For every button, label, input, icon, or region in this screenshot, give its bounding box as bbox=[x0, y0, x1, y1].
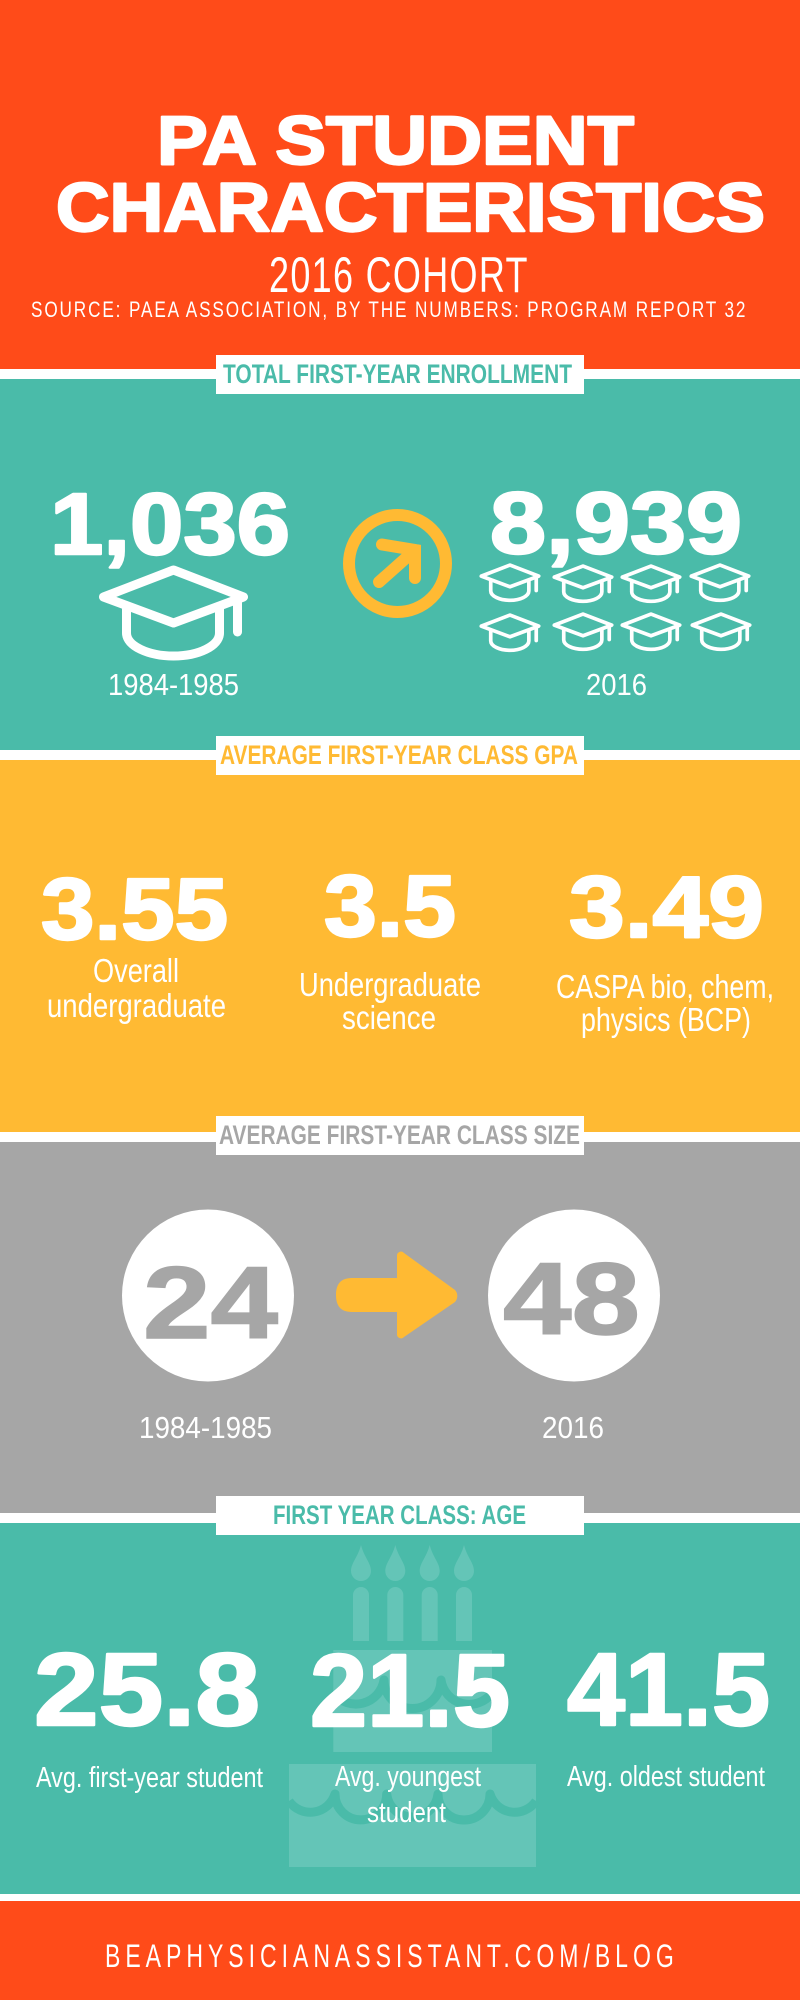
subtitle: 2016 COHORT bbox=[269, 248, 527, 303]
heading: age: FIRST YEAR CLASS: AGE bbox=[273, 1500, 526, 1530]
stat: overall undergraduate GPA bbox=[41, 861, 228, 1024]
icon: large graduation cap bbox=[104, 570, 244, 656]
heading: class size bbox=[216, 1116, 584, 1155]
stat: average youngest student age bbox=[310, 1633, 510, 1829]
stat: overall undergraduate GPA: undergraduate bbox=[47, 987, 226, 1024]
footer link text: BEAPHYSICIANASSISTANT.COM/BLOG bbox=[105, 1938, 674, 1974]
panel: header bbox=[0, 0, 800, 369]
stat circle: 48: 48 bbox=[503, 1242, 640, 1356]
panel: age bbox=[0, 1496, 800, 1894]
stat: average first-year student age bbox=[34, 1632, 263, 1794]
stat: average first-year student age: 25.8 bbox=[34, 1632, 260, 1747]
stat: CASPA BCP GPA: physics (BCP) bbox=[581, 1001, 751, 1038]
icon: birthday cake watermark bbox=[289, 1545, 536, 1867]
title line 2: CHARACTERISTICS bbox=[56, 169, 765, 246]
heading: GPA bbox=[216, 736, 584, 775]
panel: average GPA bbox=[0, 736, 800, 1132]
stat: average youngest student age: student bbox=[367, 1797, 446, 1829]
heading: enrollment: TOTAL FIRST-YEAR ENROLLMENT bbox=[223, 359, 572, 389]
panel: average class size bbox=[0, 1116, 800, 1513]
heading: class size: AVERAGE FIRST-YEAR CLASS SIZE bbox=[219, 1120, 580, 1150]
label: 1984-1985: 1984-1985 bbox=[108, 667, 239, 702]
stat: CASPA BCP GPA: 3.49 bbox=[569, 859, 764, 956]
stat: 1,036: 1,036 bbox=[50, 476, 290, 573]
stat: average oldest student age: 41.5 bbox=[567, 1632, 770, 1747]
stat: CASPA BCP GPA bbox=[556, 859, 774, 1038]
stat: average first-year student age: Avg. first-year student bbox=[36, 1762, 263, 1794]
icon: right arrow bbox=[336, 1252, 457, 1338]
label: 2016: 2016 bbox=[542, 1410, 604, 1445]
stat: undergraduate science GPA: 3.5 bbox=[324, 858, 456, 955]
stat: average youngest student age: Avg. youngest bbox=[335, 1761, 481, 1793]
stat: 8,939: 8,939 bbox=[490, 475, 742, 572]
heading: GPA: AVERAGE FIRST-YEAR CLASS GPA bbox=[220, 740, 578, 770]
stat circle: 48 bbox=[488, 1210, 660, 1382]
icon: circled up-right arrow bbox=[349, 515, 446, 612]
stat: overall undergraduate GPA: 3.55 bbox=[41, 861, 228, 958]
label: 2016: 2016 bbox=[586, 667, 647, 702]
stat: undergraduate science GPA: science bbox=[342, 999, 436, 1036]
heading: enrollment bbox=[216, 355, 584, 394]
panel: footer bbox=[0, 1901, 800, 2000]
stat circle: 24: 24 bbox=[143, 1246, 278, 1360]
title line 1: PA STUDENT bbox=[157, 102, 634, 179]
stat: undergraduate science GPA: Undergraduate bbox=[299, 966, 481, 1003]
heading: age bbox=[216, 1496, 584, 1535]
stat: overall undergraduate GPA: Overall bbox=[93, 952, 179, 989]
panel: total first-year enrollment bbox=[0, 355, 800, 750]
stat circle: 24 bbox=[122, 1210, 294, 1382]
stat: average youngest student age: 21.5 bbox=[310, 1633, 510, 1748]
label: 1984-1985: 1984-1985 bbox=[139, 1410, 272, 1445]
icon: eight graduation caps bbox=[481, 565, 750, 650]
source line: SOURCE: PAEA ASSOCIATION, BY THE NUMBERS: PROGRAM REPORT 32 bbox=[31, 298, 745, 323]
stat: undergraduate science GPA bbox=[299, 858, 481, 1036]
